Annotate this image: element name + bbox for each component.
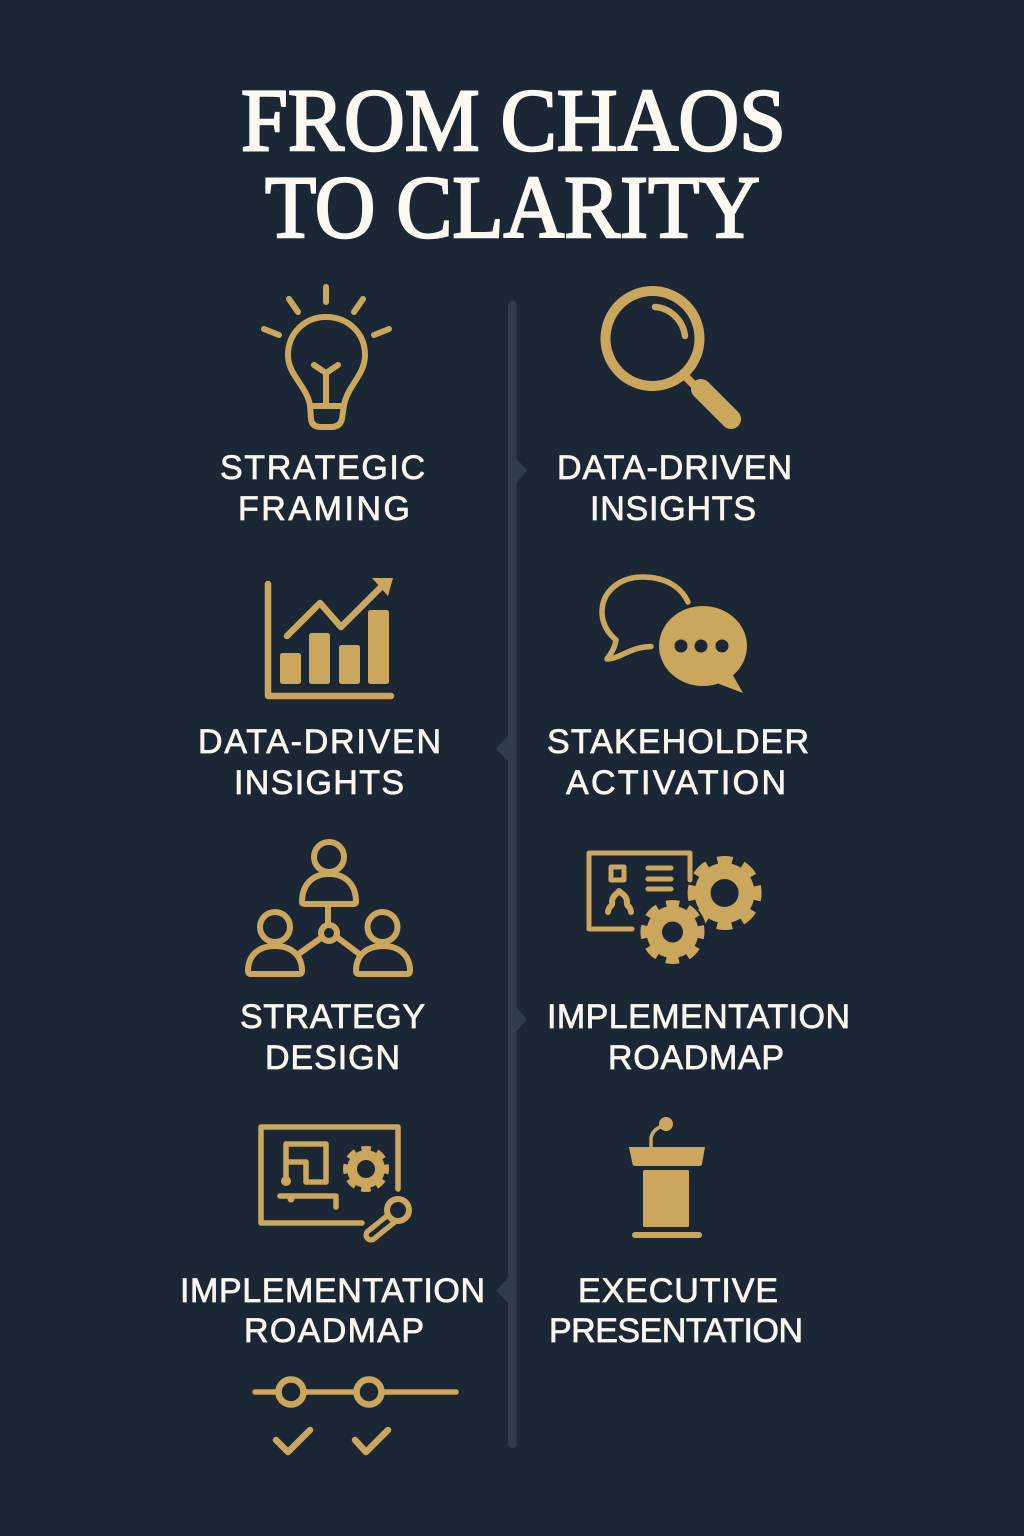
icon: timeline with checkmarks [255, 1380, 456, 1452]
label: strategic framing [220, 449, 425, 528]
icon: podium [629, 1117, 705, 1238]
label: stakeholder activation [547, 723, 809, 802]
title: FROM CHAOS [241, 72, 786, 170]
label: strategy design: DESIGN [265, 1039, 400, 1077]
icon: magnifying glass [606, 291, 731, 419]
label: data-driven insights left: INSIGHTS [234, 764, 404, 802]
label: executive presentation: EXECUTIVE [578, 1272, 778, 1310]
label: implementation roadmap right: IMPLEMENTATION [547, 998, 850, 1036]
icon: dashboard with gears [589, 853, 758, 966]
icon: bar chart with arrow [268, 578, 393, 696]
label: data-driven insights right: DATA-DRIVEN [557, 449, 792, 487]
label: data-driven insights left [198, 723, 441, 802]
label: stakeholder activation: STAKEHOLDER [547, 723, 809, 761]
label: stakeholder activation: ACTIVATION [566, 764, 786, 802]
label: executive presentation [549, 1272, 803, 1350]
label: implementation roadmap left [180, 1272, 485, 1350]
label: strategy design: STRATEGY [240, 998, 425, 1036]
icon: blueprint board with gear and key [261, 1127, 409, 1235]
icon: speech bubbles [602, 577, 747, 693]
label: data-driven insights right [557, 449, 792, 528]
label: data-driven insights left: DATA-DRIVEN [198, 723, 441, 761]
label: strategic framing: STRATEGIC [220, 449, 425, 487]
label: implementation roadmap right [547, 998, 850, 1077]
icon: light bulb [264, 287, 389, 427]
label: implementation roadmap right: ROADMAP [608, 1039, 784, 1077]
label: data-driven insights right: INSIGHTS [590, 490, 756, 528]
label: executive presentation: PRESENTATION [549, 1312, 803, 1350]
label: strategy design [240, 998, 425, 1077]
central timeline spine with chevrons [496, 301, 527, 1448]
icon: team network [248, 842, 410, 974]
label: implementation roadmap left: ROADMAP [244, 1312, 424, 1350]
label: strategic framing: FRAMING [238, 490, 410, 528]
title: TO CLARITY [265, 159, 760, 257]
title [241, 72, 786, 257]
label: implementation roadmap left: IMPLEMENTATION [180, 1272, 485, 1310]
